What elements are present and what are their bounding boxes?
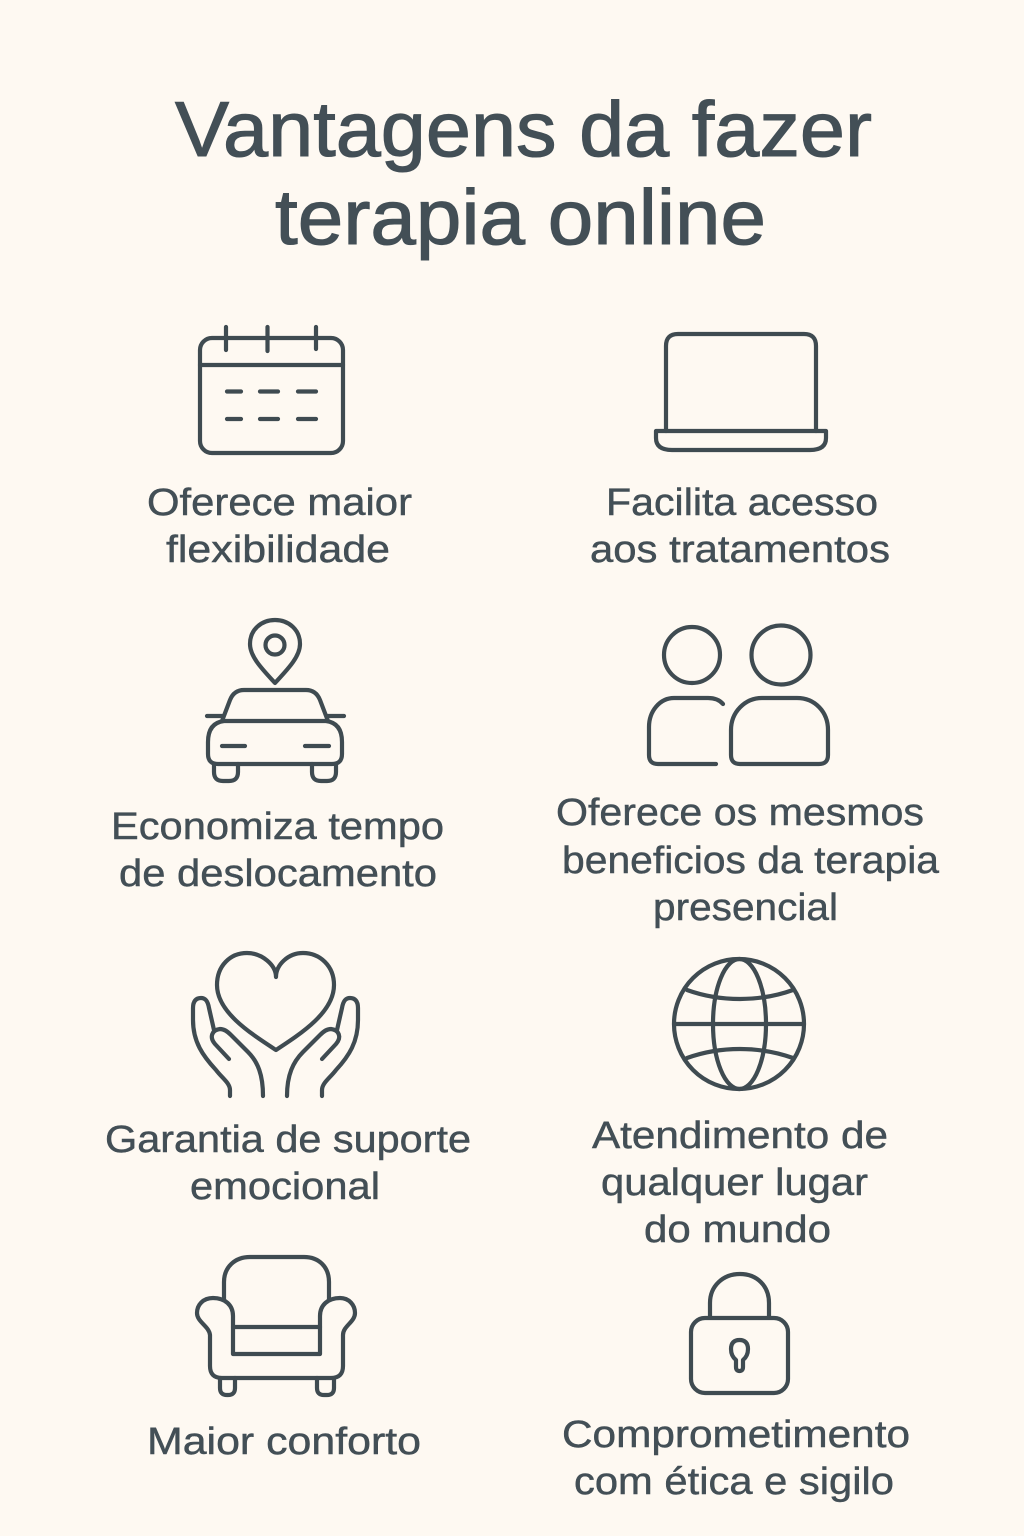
label: acesso [590, 482, 890, 571]
label: deslocamento [111, 806, 444, 895]
icon: laptop [656, 334, 826, 450]
label: qualquer lugar [592, 1115, 888, 1251]
label: suporte emocional: Garantia de suporte [105, 1119, 471, 1161]
label: mesmos beneficios [556, 792, 940, 929]
label: flexibilidade: flexibilidade [166, 529, 390, 571]
label: qualquer lugar: qualquer lugar [601, 1162, 868, 1204]
label: acesso: aos tratamentos [590, 529, 890, 571]
label: etica e sigilo: Comprometimento [562, 1414, 910, 1456]
label: deslocamento: Economiza tempo [111, 806, 444, 848]
icon: padlock [691, 1274, 788, 1393]
label: acesso: Facilita acesso [606, 482, 878, 524]
label: mesmos beneficios: Oferece os mesmos [556, 792, 924, 834]
label: conforto: Maior conforto [147, 1421, 421, 1463]
label: flexibilidade [147, 482, 412, 571]
title: terapia online [275, 173, 766, 261]
label: mesmos beneficios: beneficios da terapia [562, 840, 940, 882]
label: flexibilidade: Oferece maior [147, 482, 412, 524]
title: Vantagens da fazer [175, 85, 872, 173]
label: etica e sigilo: com ética e sigilo [574, 1461, 894, 1503]
icon: two people [649, 626, 828, 764]
icon: armchair [197, 1257, 355, 1395]
label: suporte emocional: emocional [190, 1166, 380, 1208]
icon: globe [674, 959, 804, 1089]
title [175, 85, 872, 261]
label: qualquer lugar: Atendimento de [592, 1115, 888, 1157]
label: mesmos beneficios: presencial [653, 887, 838, 929]
label: suporte emocional [105, 1119, 471, 1208]
label: qualquer lugar: do mundo [644, 1209, 831, 1251]
icon: car with location pin [207, 620, 344, 781]
label: etica e sigilo [562, 1414, 910, 1503]
icon: calendar [200, 327, 343, 453]
label: deslocamento: de deslocamento [119, 853, 437, 895]
icon: hands holding heart [193, 953, 358, 1096]
